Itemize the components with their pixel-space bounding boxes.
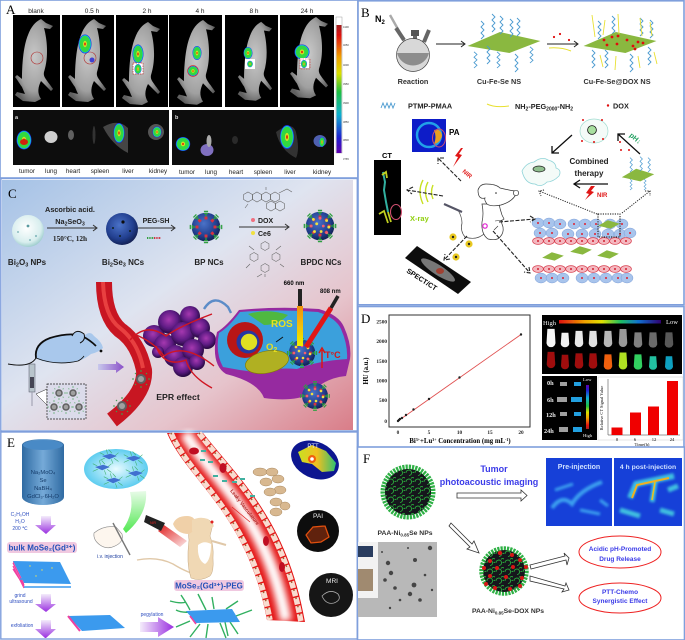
organ labels: tumor	[179, 169, 195, 176]
in vivo CT time series: Low	[583, 377, 592, 382]
reagent beaker: Na₂MoO₄	[31, 470, 56, 476]
synthesis labels: Cu-Fe-Se@DOX NS	[583, 77, 651, 86]
PA image 4 h post-injection: 4 h post-injection	[620, 464, 676, 471]
organ labels: heart	[229, 169, 243, 176]
PA image 4 h post-injection	[614, 458, 682, 526]
bar chart: relative CT signal: 0	[616, 437, 619, 442]
organ labels: spleen	[254, 169, 273, 176]
ex vivo organ images a	[13, 110, 169, 165]
time point labels: 0.5 h	[85, 8, 100, 15]
reaction conditions	[45, 205, 95, 243]
illustration: mouse	[458, 184, 519, 240]
panel letter F: F	[363, 451, 370, 466]
lasers with labels	[284, 281, 341, 347]
purple arrow	[35, 516, 56, 534]
in vivo CT time series: 0h	[547, 380, 554, 387]
DOX NP label: Se-DOX NPs	[504, 608, 544, 615]
line chart: HU vs concentration: 1500	[376, 359, 387, 365]
tumour cell: 2	[273, 347, 277, 354]
laser pointer	[144, 515, 187, 547]
tumour cluster	[143, 306, 216, 377]
arrow	[47, 225, 97, 231]
arrows: mouse to tissue	[493, 216, 535, 273]
reagent beaker: Se	[39, 478, 47, 484]
reagent beaker: NaBH₄	[34, 486, 53, 492]
bar chart: relative CT signal	[598, 377, 683, 447]
label grind ultrasound: grind	[14, 593, 26, 599]
line chart: HU vs concentration: )	[508, 438, 511, 445]
colour scale bar: 4050	[343, 43, 349, 47]
PEG-SH arrow: PEG-SH	[143, 218, 169, 225]
panel letter E: E	[7, 435, 15, 450]
synthesis labels	[398, 77, 651, 86]
legend: -NH	[557, 102, 570, 111]
in vivo CT time series: 12h	[546, 412, 556, 419]
label grind ultrasound	[9, 593, 33, 605]
reaction conditions: 200 ℃	[12, 526, 28, 532]
combined therapy cycle: therapy	[575, 169, 604, 178]
X-ray label: X-ray	[410, 214, 430, 223]
panel letter D: D	[361, 311, 370, 326]
icon: syringe	[444, 204, 462, 212]
reaction conditions: C₂H₅OH	[11, 512, 30, 518]
organ labels: kidney	[313, 169, 332, 176]
ex vivo organ images b: b	[175, 115, 179, 121]
line chart: HU vs concentration: 20	[518, 430, 524, 436]
arrow: to PA	[438, 158, 461, 181]
legend: DOX	[613, 102, 629, 110]
legend: 2	[526, 106, 529, 112]
line chart: HU vs concentration: Concentration (mg mL	[437, 438, 506, 445]
exfoliated nanosheet	[68, 615, 125, 631]
reaction conditions: Na	[55, 217, 65, 226]
extracellular nanoparticle	[301, 382, 329, 410]
arrows: tissue to therapy	[539, 190, 650, 214]
tumour cell	[215, 308, 350, 399]
panel: B Cu-Fe-Se theranostic nanosheets	[358, 1, 684, 305]
nanoparticle labels: Se	[113, 258, 123, 267]
tumor imaging heading: photoacoustic imaging	[440, 477, 538, 487]
PTT image: PTT	[307, 444, 319, 450]
legend: 2	[570, 106, 573, 112]
legend: PTMP-PMAA	[408, 102, 453, 110]
hand with syringe	[94, 523, 203, 576]
callout: drug release: Acidic pH-Promoted	[589, 546, 651, 553]
DOX-loaded nanoparticle	[482, 548, 528, 594]
TEM image with vial	[358, 542, 437, 617]
CT phantom images	[542, 315, 682, 374]
N2 label: 2	[382, 20, 386, 26]
colour scale bar: 3800	[343, 138, 349, 142]
lasers with labels: 808 nm	[320, 289, 341, 295]
PEGylated nanosheet	[170, 594, 252, 638]
panel: D CT imaging data	[358, 306, 684, 448]
colour scale bar: 3850	[343, 120, 349, 124]
label grind ultrasound: ultrasound	[9, 599, 33, 605]
organ labels: kidney	[149, 168, 168, 175]
line chart: HU vs concentration: 1000	[376, 378, 387, 384]
reaction conditions: 2	[65, 222, 68, 228]
line chart: HU vs concentration: 10	[457, 430, 462, 436]
callout: drug release	[579, 536, 661, 568]
nanosheet Cu-Fe-Se NS	[468, 14, 540, 72]
bar chart: relative CT signal: Relative CT Signal Value	[599, 386, 604, 430]
combined therapy cycle	[522, 119, 654, 200]
reaction conditions: 150°C, 12h	[53, 234, 87, 243]
bar chart: relative CT signal: 6	[634, 437, 637, 442]
icon: X-ray waves	[420, 180, 433, 204]
green injection beam	[123, 491, 146, 533]
organ labels: heart	[66, 168, 80, 175]
in vivo CT time series: 24h	[544, 428, 554, 435]
purple arrow	[35, 594, 56, 612]
line chart: HU vs concentration: 5	[428, 430, 431, 436]
legend: -PEG	[528, 102, 546, 111]
tumour cell cluster	[253, 468, 290, 516]
reaction conditions: SeO	[67, 217, 82, 226]
icon: reaction flask	[390, 15, 430, 72]
combined therapy cycle: pH↓	[628, 132, 642, 146]
sphere Bi2O3 NPs	[12, 215, 44, 247]
bulk MoSe2 label: bulk MoSe₂(Gd³⁺)	[9, 544, 76, 552]
time point labels	[28, 8, 314, 15]
tumour cell: ROS	[271, 319, 293, 330]
line chart: HU vs concentration: HU (a.u.)	[363, 358, 370, 384]
EPR label: EPR effect	[156, 392, 200, 402]
PAA label: PAA-Ni	[377, 530, 400, 537]
callout: synergistic effect	[579, 583, 661, 613]
hollow arrow to imaging	[457, 490, 527, 501]
whole-body fluorescence images	[13, 15, 334, 107]
blood vessel with leaky vasculature	[167, 433, 305, 622]
panel: A biodistribution imaging	[0, 0, 358, 178]
reagent beaker	[22, 439, 64, 505]
line chart: HU vs concentration: 2500	[376, 320, 387, 326]
BPDC NC sphere	[304, 210, 336, 242]
DOX NP label: 0.85	[495, 610, 504, 616]
line chart: HU vs concentration: 2000	[376, 339, 387, 345]
colour scale bar: 4000	[343, 63, 349, 67]
blood vessel with leaky vasculature: Leaky Vasculature	[228, 489, 260, 527]
time point labels: 2 h	[142, 8, 152, 15]
nanoparticle labels: 2	[16, 262, 19, 268]
synthesis labels: Cu-Fe-Se NS	[477, 77, 521, 86]
panel: C Bi2Se3 PDT/PTT nanocapsules	[1, 178, 357, 431]
bar chart: relative CT signal: 12	[652, 437, 657, 442]
laser pointer: NIR	[150, 521, 156, 525]
arrow: reaction to nanosheet	[436, 41, 465, 47]
hollow arrow to synergistic effect	[530, 576, 569, 592]
nanoparticle labels: BPDC NCs	[301, 258, 342, 267]
drug loading arrow and molecules	[239, 187, 292, 277]
PAA nanoparticle	[383, 467, 433, 517]
organ labels: liver	[284, 169, 296, 176]
reagent beaker: GdCl₃·6H₂O	[27, 494, 59, 500]
line chart: HU vs concentration: 500	[379, 398, 387, 404]
injection syringe and NP inset	[29, 364, 86, 419]
nanoparticle labels: O	[19, 258, 25, 267]
line chart: HU vs concentration: Bi	[409, 438, 416, 445]
synthesis labels: Reaction	[398, 77, 428, 86]
nanoparticle labels: Bi	[8, 258, 16, 267]
icon: NIR bolt with label	[453, 148, 473, 181]
time point labels: 4 h	[195, 8, 205, 15]
arrow: to SPECT	[444, 236, 467, 260]
panel letter C: C	[8, 186, 17, 201]
reaction conditions: Ascorbic acid.	[45, 205, 95, 214]
PA image: PA	[449, 128, 460, 137]
SPECT/CT image: SPECT/CT	[405, 268, 438, 293]
colour scale bar: 3900	[343, 101, 349, 105]
PA image pre-injection: Pre-injection	[558, 464, 600, 471]
reaction conditions: 3	[82, 222, 85, 228]
PAI image: PAI	[313, 513, 323, 520]
icon: radiation symbols	[449, 233, 473, 261]
line chart: HU vs concentration: +Lu	[420, 438, 432, 445]
callout: drug release: Drug Release	[599, 556, 641, 563]
MRI image: MRI	[326, 578, 338, 585]
organ labels: spleen	[91, 168, 110, 175]
BP NC sphere	[190, 211, 222, 243]
time point labels: blank	[28, 8, 45, 15]
line chart: HU vs concentration	[363, 315, 530, 445]
PAA label: Se NPs	[409, 530, 433, 537]
SPECT/CT image	[405, 246, 471, 294]
organ labels: lung	[45, 168, 57, 175]
nanoparticle labels: 3	[123, 262, 126, 268]
callout: synergistic effect: Synergistic Effect	[593, 598, 648, 605]
combined therapy cycle: Combined	[569, 157, 609, 166]
sphere Bi2Se3 NCs	[106, 213, 138, 245]
callout: synergistic effect: PTT-Chemo	[602, 589, 638, 596]
CT image	[374, 151, 402, 235]
nanoparticle labels: 2	[110, 262, 113, 268]
hollow arrow to drug release	[530, 553, 569, 569]
N2 label: N	[375, 14, 382, 24]
colour scale bar: 3765	[343, 157, 349, 161]
nanosheet Cu-Fe-Se@DOX NS	[584, 14, 657, 72]
illustration: mouse with laser	[173, 516, 226, 580]
drug loading arrow and molecules: DOX	[258, 218, 274, 225]
reaction conditions: H₂O	[15, 519, 25, 525]
in vivo CT time series: High	[583, 433, 593, 438]
DOX NP label: PAA-Ni	[472, 608, 495, 615]
purple arrow	[35, 620, 56, 638]
nanoparticle labels: NPs	[28, 258, 47, 267]
organ labels: tumor	[19, 168, 35, 175]
ex vivo organ images a: a	[15, 115, 19, 121]
line chart: HU vs concentration: 3+	[432, 437, 437, 442]
nanoparticle labels: Bi	[102, 258, 110, 267]
label pegylation: pegylation	[141, 612, 164, 618]
line chart: HU vs concentration: 0	[397, 430, 400, 436]
CT phantom images: High	[543, 320, 557, 327]
legend: 2000	[546, 106, 558, 112]
nanoparticle labels: NCs	[126, 258, 145, 267]
PA image pre-injection	[546, 458, 612, 526]
nanoparticle labels: 3	[25, 262, 28, 268]
tumour vessels	[130, 314, 214, 388]
illustration: mouse	[8, 331, 103, 365]
MoSe2-PEG label: MoSe₂(Gd³⁺)-PEG	[175, 582, 243, 590]
line chart: HU vs concentration: 15	[487, 430, 493, 436]
colour scale bar: 4100	[343, 25, 349, 29]
CT image: CT	[382, 151, 392, 160]
time point labels: 8 h	[249, 8, 259, 15]
tumor imaging heading	[440, 464, 538, 487]
in vivo CT time series: 6h	[547, 397, 554, 404]
arrow: to X-ray CT	[407, 187, 443, 196]
drug loading arrow and molecules: Ce6	[258, 231, 271, 238]
nanoparticle labels	[8, 258, 342, 268]
line chart: HU vs concentration: -1	[505, 437, 508, 442]
bar chart: relative CT signal: Time(h)	[635, 442, 650, 447]
time point labels: 24 h	[301, 8, 314, 15]
icon: NIR bolt with label: NIR	[461, 169, 473, 181]
label exfoliation: exfoliation	[11, 623, 33, 629]
lasers with labels: 660 nm	[284, 281, 304, 287]
panel: E MoSe2(Gd3+)-PEG nanosheets	[1, 432, 357, 639]
nanosheet bubble	[84, 449, 148, 489]
organ labels	[19, 168, 332, 176]
panel letter A: A	[6, 2, 16, 17]
ex vivo organ images b	[172, 110, 334, 165]
line chart: HU vs concentration: 0	[384, 419, 387, 425]
tumour cell: T°C	[325, 350, 341, 360]
MRI image	[309, 573, 353, 617]
PA image	[412, 119, 460, 152]
arrow pegylation	[140, 617, 174, 637]
curved arrow	[204, 300, 231, 313]
arrow with DOX and PEG reagents	[547, 33, 578, 51]
panel: F PAA-NiSe nanoparticles	[358, 447, 684, 640]
combined therapy cycle: NIR	[597, 193, 608, 199]
organ labels: lung	[205, 169, 217, 176]
PAA label: 0.85	[400, 532, 410, 538]
bar chart: relative CT signal: 24	[670, 437, 675, 442]
tumor imaging heading: Tumor	[480, 464, 508, 474]
colour scale bar	[336, 17, 349, 161]
bulk nanosheet stack	[13, 561, 71, 588]
PTT image	[285, 433, 345, 487]
injection label: i.v. injection	[97, 554, 123, 560]
panel letter B: B	[361, 5, 370, 20]
line chart: HU vs concentration: 3+	[416, 437, 421, 442]
reaction conditions	[11, 512, 30, 532]
in vivo CT time series	[542, 376, 597, 440]
colour scale bar: 3950	[343, 82, 349, 86]
PAI image	[297, 510, 339, 552]
arrow: mouse to vessel	[98, 361, 124, 373]
PEG-SH arrow	[138, 218, 175, 238]
tumour cell: O	[266, 342, 273, 353]
nanoparticle labels: BP NCs	[194, 258, 224, 267]
hollow arrow to DOX nanoparticle	[449, 523, 479, 553]
CT phantom images: Low	[666, 319, 678, 326]
legend	[381, 102, 629, 112]
organ labels: liver	[122, 168, 134, 175]
tumour vessel cells	[532, 214, 636, 283]
legend: NH	[515, 102, 526, 111]
blood vessel	[103, 282, 150, 420]
